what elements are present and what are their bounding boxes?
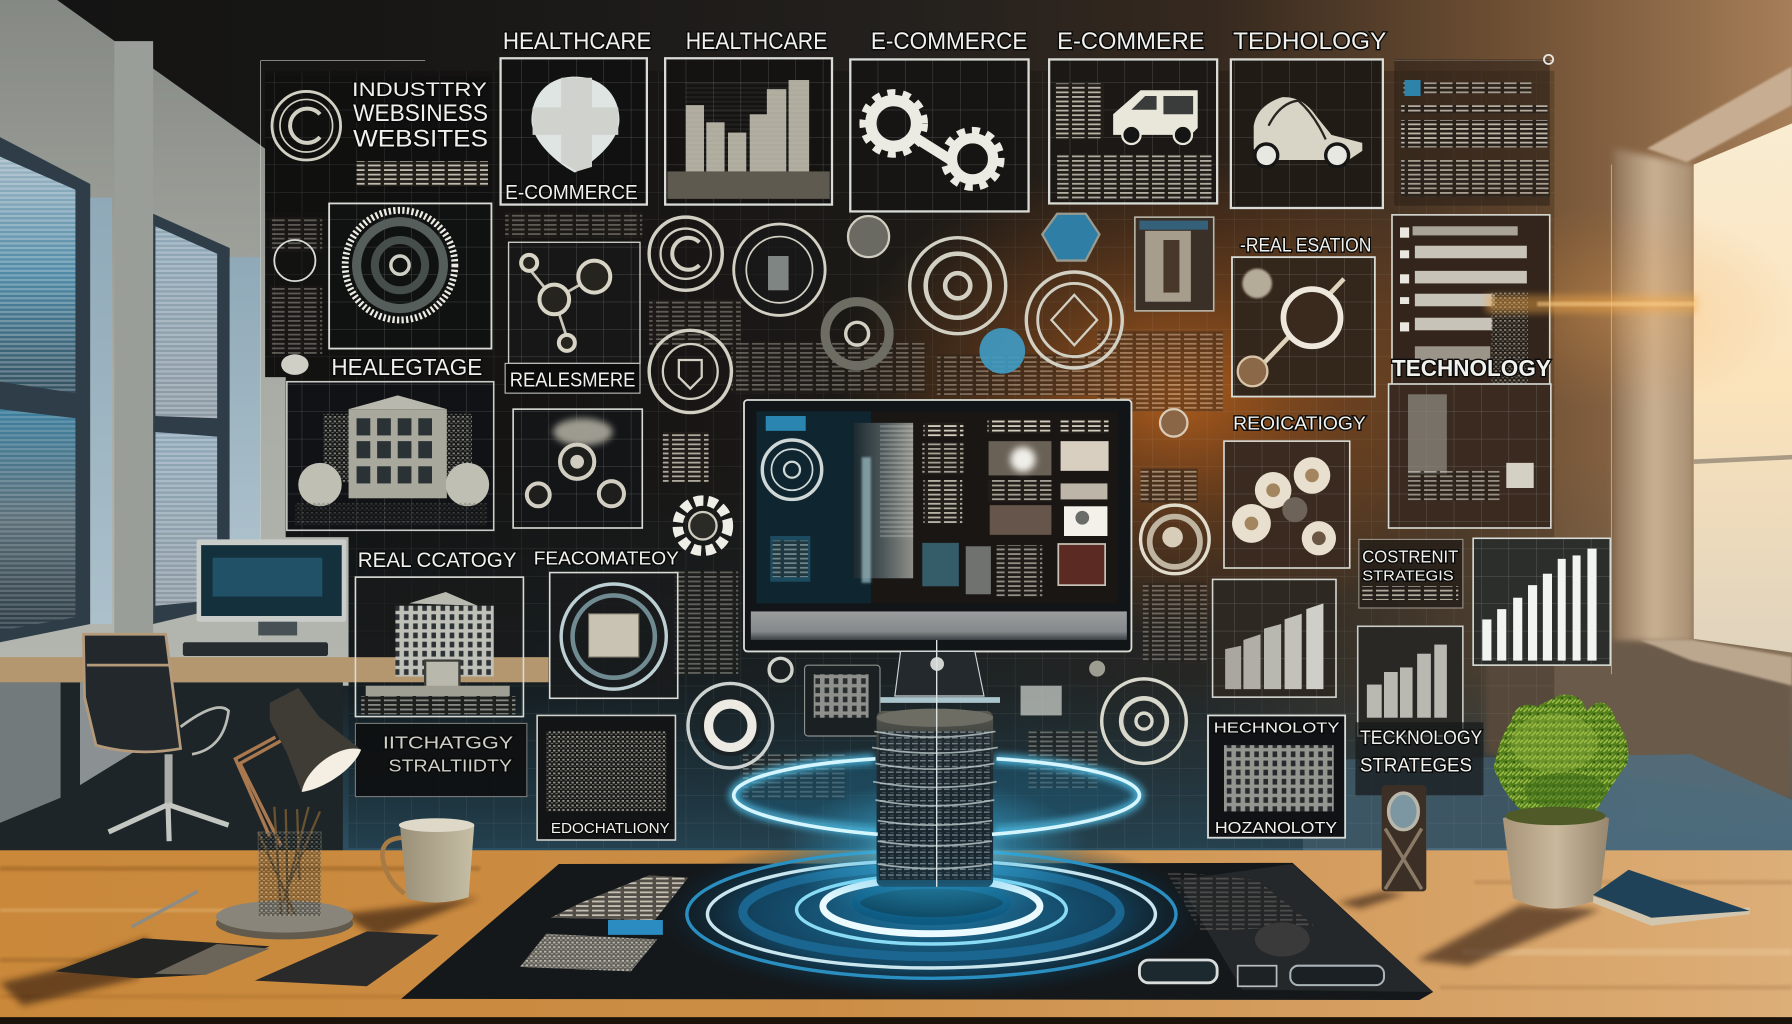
mesh cup [258,832,321,917]
ring 2 [734,224,825,315]
text block 5 [1061,419,1109,433]
white tile icon [1075,511,1089,525]
icon: gear link [914,137,951,160]
panel: article text [1394,55,1553,206]
link lines [529,269,594,337]
screen [757,411,1118,603]
photo stripe [1139,221,1208,230]
header: e-commerce 2: E-COMMERE [1057,28,1205,55]
panel: bright bar chart [1473,538,1610,665]
stand [895,651,984,696]
window mullion [1694,455,1792,464]
header: healthcare: HEALTHCARE [503,28,651,55]
side wings [323,414,349,482]
tile grid [814,674,869,718]
centre booklet [255,931,439,986]
chart floor [667,171,830,199]
desk lamp [216,688,361,939]
icon: blue badge [1042,214,1099,261]
dark pillar corner [114,41,153,658]
icon: car arc [1269,101,1326,139]
desk mat [401,830,1433,1000]
ornament lens [1389,793,1418,830]
desk surface [0,850,1792,1018]
icon: gear small [952,138,993,179]
foliage shade [1525,773,1607,809]
panel: noise image [537,715,675,840]
tree left [298,463,342,506]
lower left board [355,547,773,840]
rim [399,818,474,832]
panel: hotel building [1208,715,1345,838]
text rows 4 [1401,160,1550,197]
label text: REALESMERE [510,368,635,391]
bottom label: HOZANOLOTY [1215,820,1338,837]
title line 3: WEBSITES [353,125,488,152]
top label: HECHNOLOTY [1214,721,1340,737]
sun flare [1486,295,1697,313]
orange glow [834,154,1520,634]
light beam [862,457,871,583]
header: e-commerce: E-COMMERCE [871,28,1027,55]
photo content [1145,231,1191,302]
label line 1: COSTRENIT [1362,546,1459,566]
icon: key end [1238,357,1267,386]
lower tile 2 [966,546,991,594]
building body [395,606,494,677]
van wheels [1122,126,1192,144]
icon: flower gear [678,501,728,551]
server stack [872,640,998,887]
light blocks [1021,686,1062,715]
coffee mug [382,818,474,903]
stack texture [879,731,991,880]
stack layers [872,731,998,869]
icon: gear small teeth [944,130,1001,187]
panel: key [1232,257,1375,397]
car wheels [1255,144,1349,167]
building [1224,745,1334,811]
panel: delivery van [1049,59,1217,203]
floor row [295,503,487,526]
tile grid panel [805,665,880,736]
icon: gear large [871,101,917,146]
scraps near stand [805,665,1062,736]
lower wall segment [80,682,139,785]
swirl inner [570,455,584,469]
text block 2 [922,442,963,474]
background desk area [0,539,549,841]
list bullets [1400,227,1409,331]
icon: spiral ring [1141,505,1209,574]
small ring right [1089,661,1105,677]
title line 2: WEBSINESS [353,100,488,127]
wooden phone ornament [1382,785,1426,891]
blue button [766,416,806,431]
label: real ccatogy: REAL CCATOGY [358,547,517,572]
left text panel [770,536,810,582]
nodes [521,255,610,351]
van windows [1131,96,1193,114]
mat blue glow [657,830,1206,999]
mat icon 3 [1290,966,1384,985]
text rows [1403,82,1531,94]
text block [1057,154,1211,200]
panel: content strategies [1359,539,1463,608]
crate graphic [1055,83,1104,138]
ring white inner [823,879,1040,934]
icon: cross [533,78,618,171]
bar texture [686,80,809,171]
icon: key ring [1283,289,1341,346]
ring 4 [910,238,1006,334]
stack axis [936,640,937,887]
tile 3 [990,505,1051,535]
striped bar [357,161,488,186]
image tile [989,441,1051,475]
header: technology: TEDHOLOGY [1233,28,1386,55]
text block 3 [923,480,962,523]
roof [409,592,478,606]
mat fold flap [1177,864,1433,992]
stack top [877,709,993,727]
detail rows [1362,586,1458,600]
rising pane 3 [1264,624,1281,689]
window sill [1640,640,1792,686]
under desk shadow [0,682,343,854]
side wing right [447,414,472,482]
panel: window chart [1213,579,1336,697]
text scrap [663,432,709,482]
mat icon 1 [1139,960,1217,983]
panel: radial gear [329,203,491,349]
office chair [83,634,229,841]
icon: medical shield [531,77,619,173]
ring glow halo [734,759,1141,827]
rising pane 2 [1243,634,1261,689]
icon: white ring badge [688,683,773,768]
line 1: IITCHATGGY [383,733,514,753]
small emblem [281,354,309,375]
panel: car [1231,59,1383,208]
left booklet 2 [154,944,270,975]
block image [1506,463,1534,488]
corner dot [1544,55,1553,64]
panel: bar chart [665,58,832,205]
noise image [546,731,666,811]
plant pot [1503,807,1609,909]
disc centres [1245,469,1326,545]
tower lines [880,425,913,539]
rising panes [1225,646,1241,689]
podium [366,686,510,696]
smoke [553,418,613,446]
icon: car body [1254,97,1362,160]
room left side [0,0,349,854]
lower tile [922,543,959,586]
icon: key shaft [1255,279,1344,373]
texture scraps between panels [270,213,1223,800]
eye icon [762,440,822,499]
bars [686,80,809,171]
image highlight [1010,447,1035,472]
plant [1494,695,1628,814]
label: feacomateoy: FEACOMATEOY [534,548,679,569]
panel: blueprint tower [1389,384,1551,528]
label: technology: TECHNOLOGY [1392,355,1551,381]
rising pane 5 [1306,603,1323,689]
line 2: STRALTIIDTY [389,755,513,775]
panel: nodes [509,242,640,363]
panel: swirls [513,409,642,528]
arm [235,737,281,846]
small ring [274,240,315,281]
notebook [1593,870,1750,926]
label: reoicatiogy: REOICATIOGY [1233,413,1366,434]
ornament bands [1385,829,1422,889]
sun glow [1451,203,1792,409]
room right side [1303,66,1792,850]
panel: industry websites [265,77,491,211]
pens [258,807,320,914]
roof [349,395,447,409]
outer ring [687,850,1176,978]
tree right [446,463,489,506]
rings cluster [649,214,1122,413]
mat icon 2 [1238,966,1277,986]
lower wall [1486,642,1792,800]
panel: photo [1135,217,1214,311]
white tile [1064,506,1107,536]
tower image [1408,394,1447,474]
ring dark center [856,885,1007,921]
mat blue tab [608,920,663,935]
ring 5 [1026,272,1122,368]
wall blue fade [263,457,1792,857]
shade opening [302,748,361,792]
small ring [769,658,792,681]
icon: radial dial [345,210,455,320]
swirl main [527,445,624,506]
text block 4 [987,419,1050,433]
header: healthcare 2: HEALTHCARE [686,28,827,55]
label: real esation: -REAL ESATION [1240,234,1371,256]
board grid [265,71,1554,848]
mat tile left top [551,875,688,920]
ring 3 [649,330,731,413]
icon: gear large teeth [863,93,925,154]
foliage [1494,695,1628,814]
background monitor [183,539,346,656]
rising pane 4 [1285,614,1302,689]
text block 1 [923,423,963,437]
main monitor [744,400,1131,703]
label line 2: STRATEGIS [1362,569,1454,585]
holographic board [261,28,1611,848]
text rows 2 [1401,105,1547,113]
label: E-COMMERCE [505,181,638,204]
image tile light [1061,441,1109,471]
lower middle tile [997,545,1042,597]
label: technology strategies [1355,722,1483,795]
top rule [261,61,1611,674]
stand pin [930,657,944,671]
cover [1593,870,1750,918]
chart bars [1367,645,1447,718]
cloud texture [1242,269,1272,298]
right window glass [1694,123,1792,653]
icon: box [589,614,639,657]
building body [349,409,447,498]
flare core [1537,302,1697,306]
floor [1303,754,1792,850]
building windows [357,418,432,483]
left booklet [55,938,270,978]
base light beam [781,781,1089,922]
blue thumb [1405,80,1421,96]
ring white [707,861,1155,968]
pen knife [131,891,198,927]
pages [1593,896,1750,926]
ring blue [743,867,1120,957]
icon: lower right ring [1102,679,1186,763]
label: EDOCHATLIONY [551,821,670,837]
panel: grey bars [1358,626,1463,736]
line 1: TECKNOLOGY [1360,727,1482,749]
mat tile lines [551,875,688,920]
background desk [0,657,549,682]
small ring top [1160,409,1187,437]
right window reveal [1614,149,1694,642]
window top ledge [1647,66,1792,162]
mat tile left bottom [520,934,657,971]
shade [270,688,361,792]
circle rings [561,584,666,689]
panel: building model [287,382,494,530]
board dark tint [265,71,1554,848]
mouse [1255,922,1310,957]
speckle block [1491,291,1528,389]
mat sketch [1166,871,1314,931]
front glow ring [734,759,1139,834]
base [216,901,353,939]
framed chart [1058,544,1105,585]
panel: strategy text [355,723,527,797]
screen tint left [757,411,871,603]
body [400,825,474,903]
tower [854,423,913,578]
left text rows [773,541,808,577]
panel: discs [1224,441,1350,568]
chin [751,611,1127,640]
icon: blue dot [979,328,1025,374]
image tile rows [989,480,1051,502]
panel: list [1392,215,1550,414]
photo figure [1163,240,1179,293]
left window [0,137,112,642]
pot soil [1505,807,1606,825]
ring 7 [825,302,889,366]
panel: gears [850,59,1029,211]
chart bars [1482,549,1597,661]
list rows [1413,226,1527,360]
detail lines [1408,471,1499,501]
desk shadows [0,891,1600,1006]
foliage light [1511,713,1598,773]
blueprint scraps [1141,469,1198,503]
podium lines [361,696,515,714]
back glow ring [734,759,1139,832]
panel: building two [355,577,523,717]
left side wall [0,0,349,686]
ring 6 [848,216,889,257]
label: realesmere [505,363,640,393]
mat tile lines bottom [520,934,657,971]
desk edge [0,1017,1792,1024]
text rows 3 [1401,120,1547,147]
icon: copyright ring [272,91,341,160]
image tile rows light [1061,483,1107,499]
panel: healthcare shield [501,58,647,205]
ring 1 [649,217,722,290]
panel: circle box [550,573,678,698]
lower wall [0,682,61,823]
holographic rings [687,850,1176,978]
line 2: STRATEGES [1360,754,1472,776]
label: healegtage: HEALEGTAGE [331,354,482,380]
handle [382,838,405,894]
discs [1232,457,1336,555]
ring bright [797,875,1066,944]
wood grain [0,866,1792,999]
stand base [877,697,1000,703]
title line 1: INDUSTTRY [352,79,487,101]
building entry [425,661,459,688]
right window [153,214,261,624]
pen holder [258,807,321,917]
icon: van [1113,90,1198,135]
